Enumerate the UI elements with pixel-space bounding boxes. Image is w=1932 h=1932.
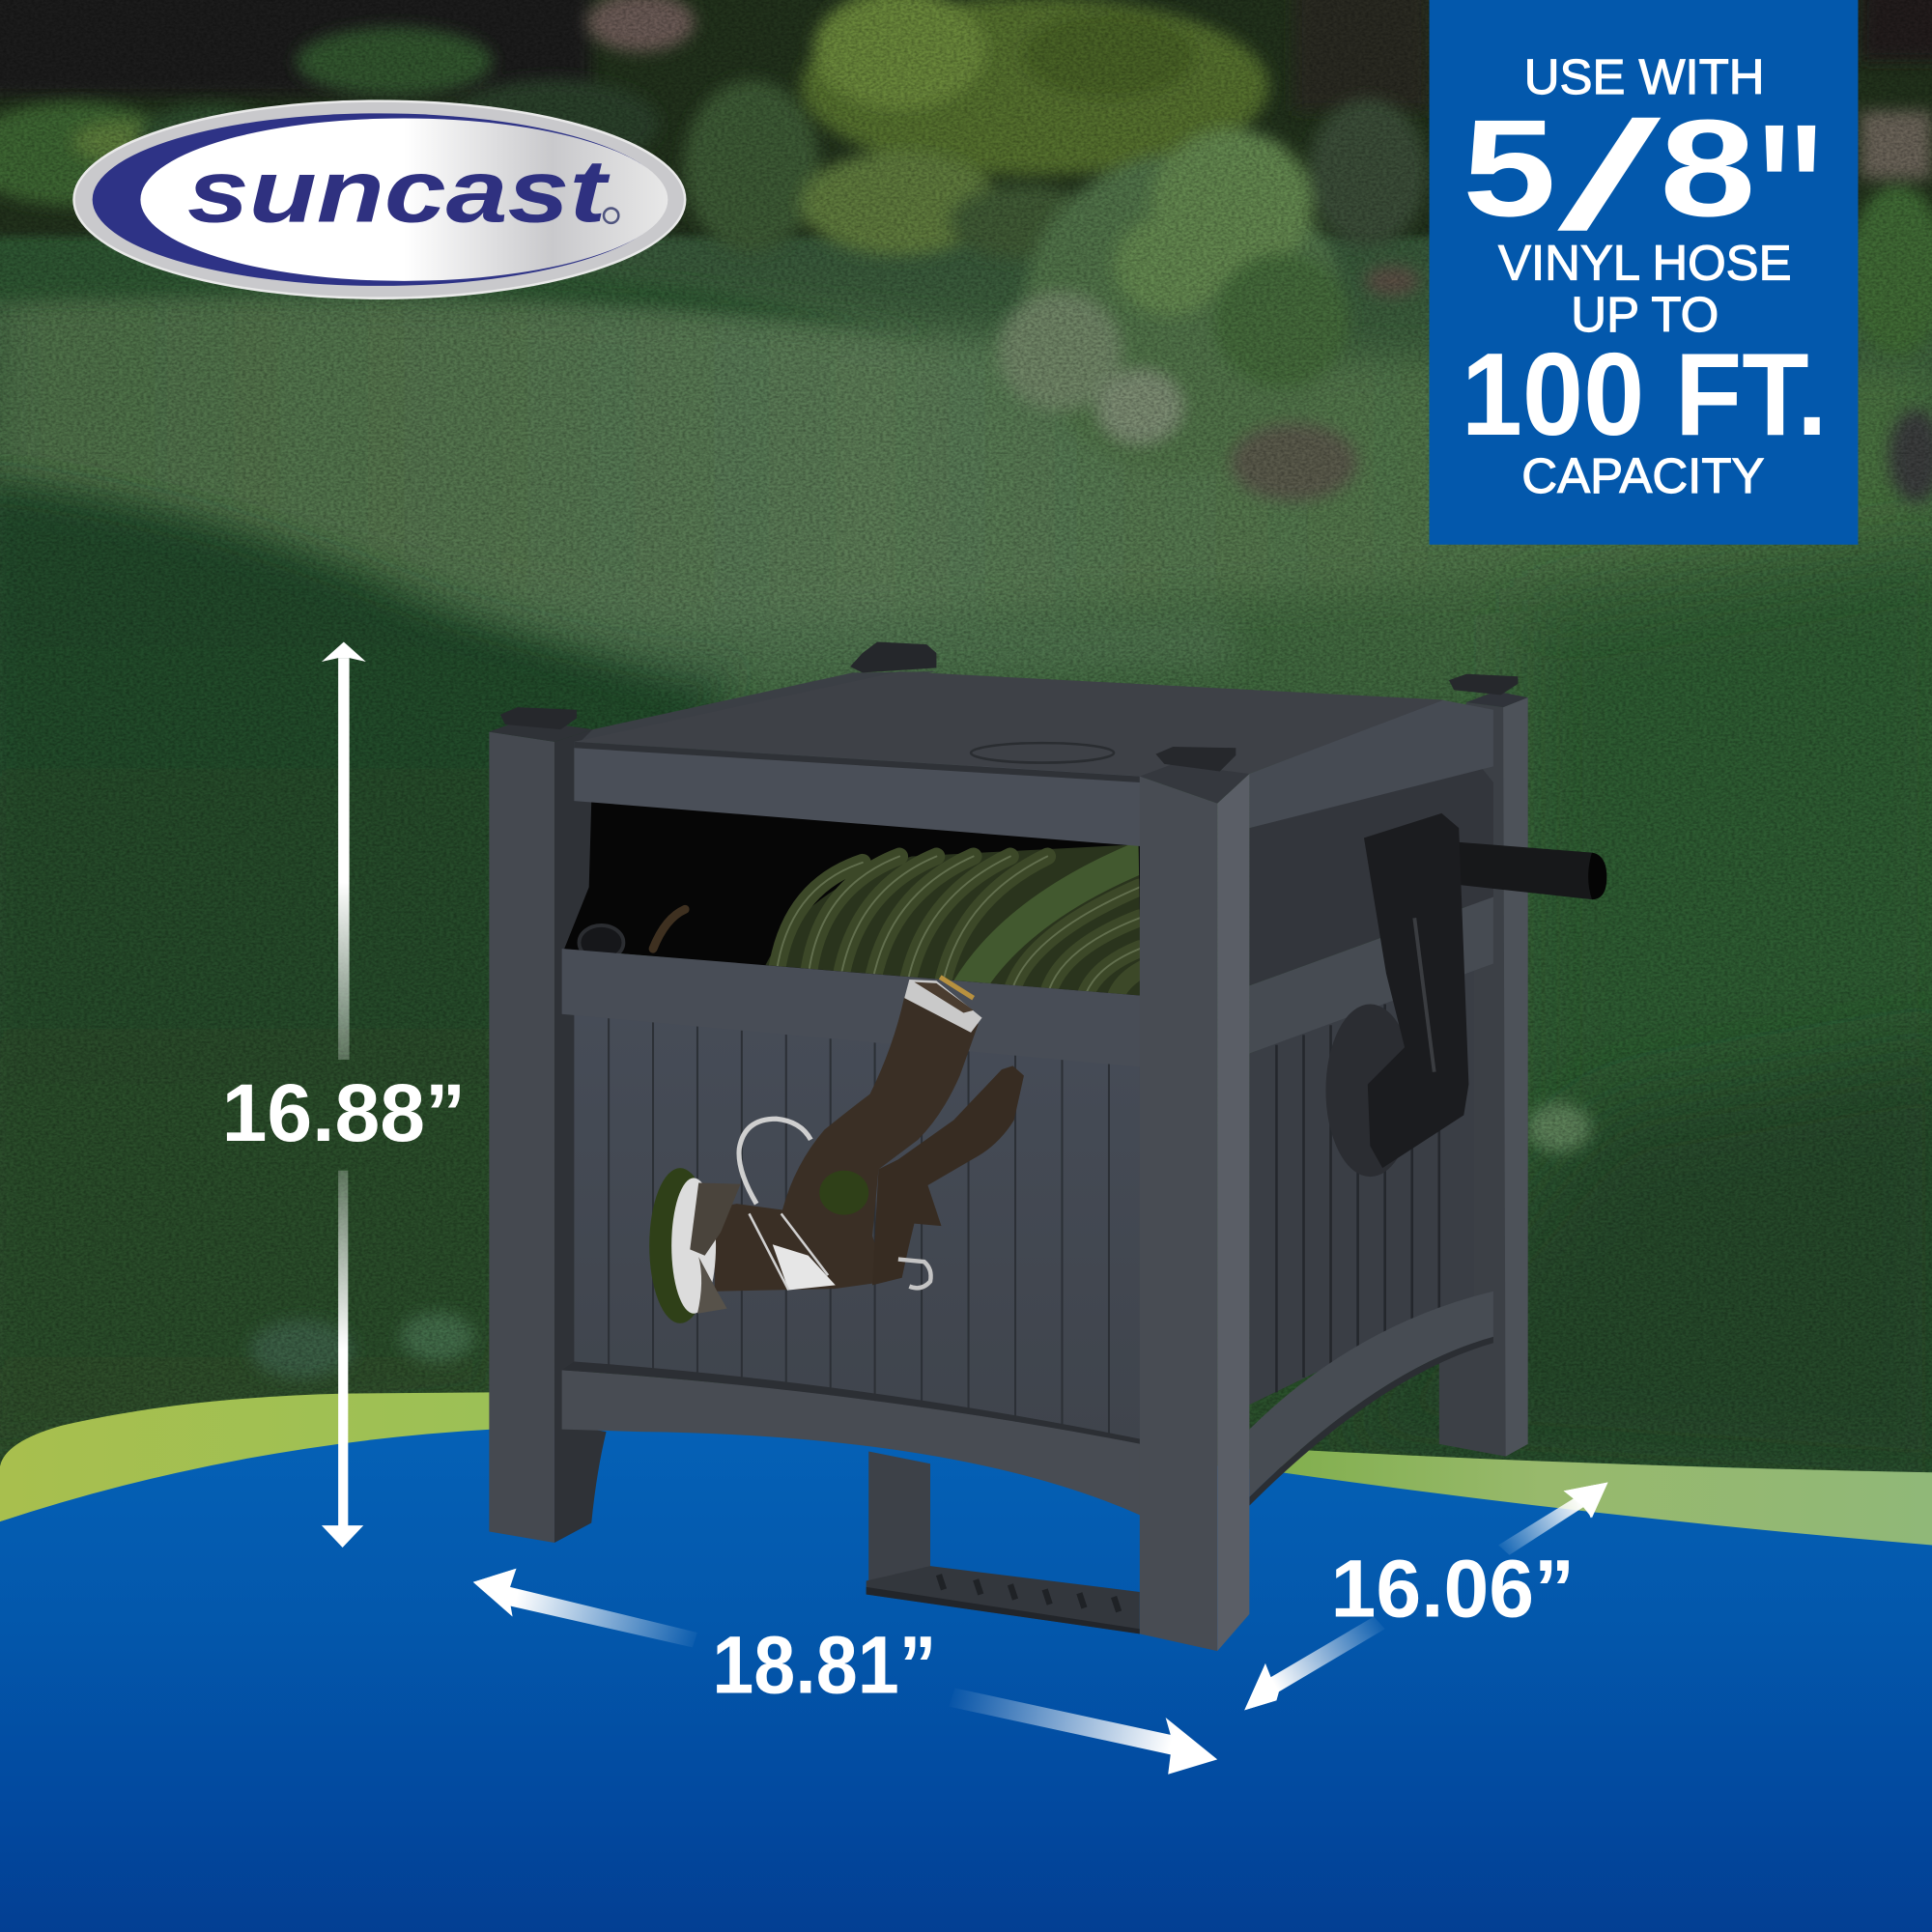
front bottom arched rail	[562, 1370, 1141, 1516]
hose coil	[653, 844, 1146, 1005]
text: numeral 8: 8	[1660, 92, 1756, 245]
label: depth 16.06: 16.06”	[1331, 1543, 1575, 1634]
rear right post	[1439, 674, 1528, 1457]
arrow: depth	[1244, 1482, 1608, 1710]
text: capacity: CAPACITY	[1521, 448, 1765, 503]
product: hose reel box	[489, 642, 1528, 1651]
nozzle chrome face	[671, 1178, 716, 1314]
shrubs and garden plants	[0, 0, 1932, 1378]
label: width 18.81: 18.81”	[712, 1620, 936, 1711]
nozzle hook	[898, 1260, 931, 1288]
text: up to: UP TO	[1571, 287, 1719, 342]
green ground band left	[0, 1392, 493, 1521]
rear centre leg and step	[867, 1452, 1140, 1634]
logo wordmark: suncast	[187, 143, 611, 242]
lid logo emboss	[971, 743, 1114, 763]
side mid rail	[1249, 897, 1493, 1054]
front panel with grooves	[574, 1012, 1141, 1444]
dark backdrop behind shrubs	[0, 0, 1932, 237]
opening: hose chamber	[564, 801, 1146, 1005]
blue ground	[0, 1430, 1932, 1932]
logo: suncast	[74, 101, 685, 298]
front corner post	[1140, 747, 1249, 1651]
registered mark	[604, 209, 618, 223]
side panel lower with grooves	[1249, 967, 1474, 1405]
rear cap	[850, 642, 936, 672]
nozzle collar	[904, 980, 982, 1033]
post cap	[500, 707, 577, 729]
icon: crank handle	[1325, 813, 1606, 1177]
left post	[489, 707, 607, 1543]
post cap	[1449, 674, 1518, 695]
nozzle green dial	[649, 1168, 711, 1323]
nozzle loop	[739, 1119, 810, 1204]
panel: capacity callout	[1430, 0, 1858, 545]
lid top	[574, 671, 1444, 777]
front mid rail	[562, 949, 1141, 1067]
green ground band right	[1282, 1449, 1932, 1548]
nozzle barrel	[715, 997, 979, 1292]
arrow: width	[473, 1569, 1217, 1775]
side bottom rail	[1249, 1292, 1493, 1497]
nozzle chrome band	[773, 1244, 836, 1290]
lid rear rail	[579, 671, 936, 743]
text: inch marks: ''	[1758, 85, 1822, 292]
side panel upper	[1249, 764, 1493, 985]
text: 100 ft: 100 FT.	[1462, 328, 1828, 460]
text: slash: /	[1557, 90, 1662, 262]
side lid rail	[1249, 699, 1493, 828]
lawn grain	[0, 0, 1932, 1479]
text: vinyl hose: VINYL HOSE	[1498, 236, 1792, 291]
text: numeral 5: 5	[1463, 92, 1556, 245]
icon: spray nozzle	[649, 977, 1024, 1323]
arrow: height	[322, 642, 366, 1548]
nozzle green button	[819, 1171, 868, 1215]
lid front	[574, 742, 1144, 846]
post cap	[1155, 747, 1236, 771]
text: use with: USE WITH	[1524, 49, 1765, 104]
nozzle trigger	[872, 1065, 1024, 1285]
label: height 16.88: 16.88”	[222, 1067, 466, 1158]
